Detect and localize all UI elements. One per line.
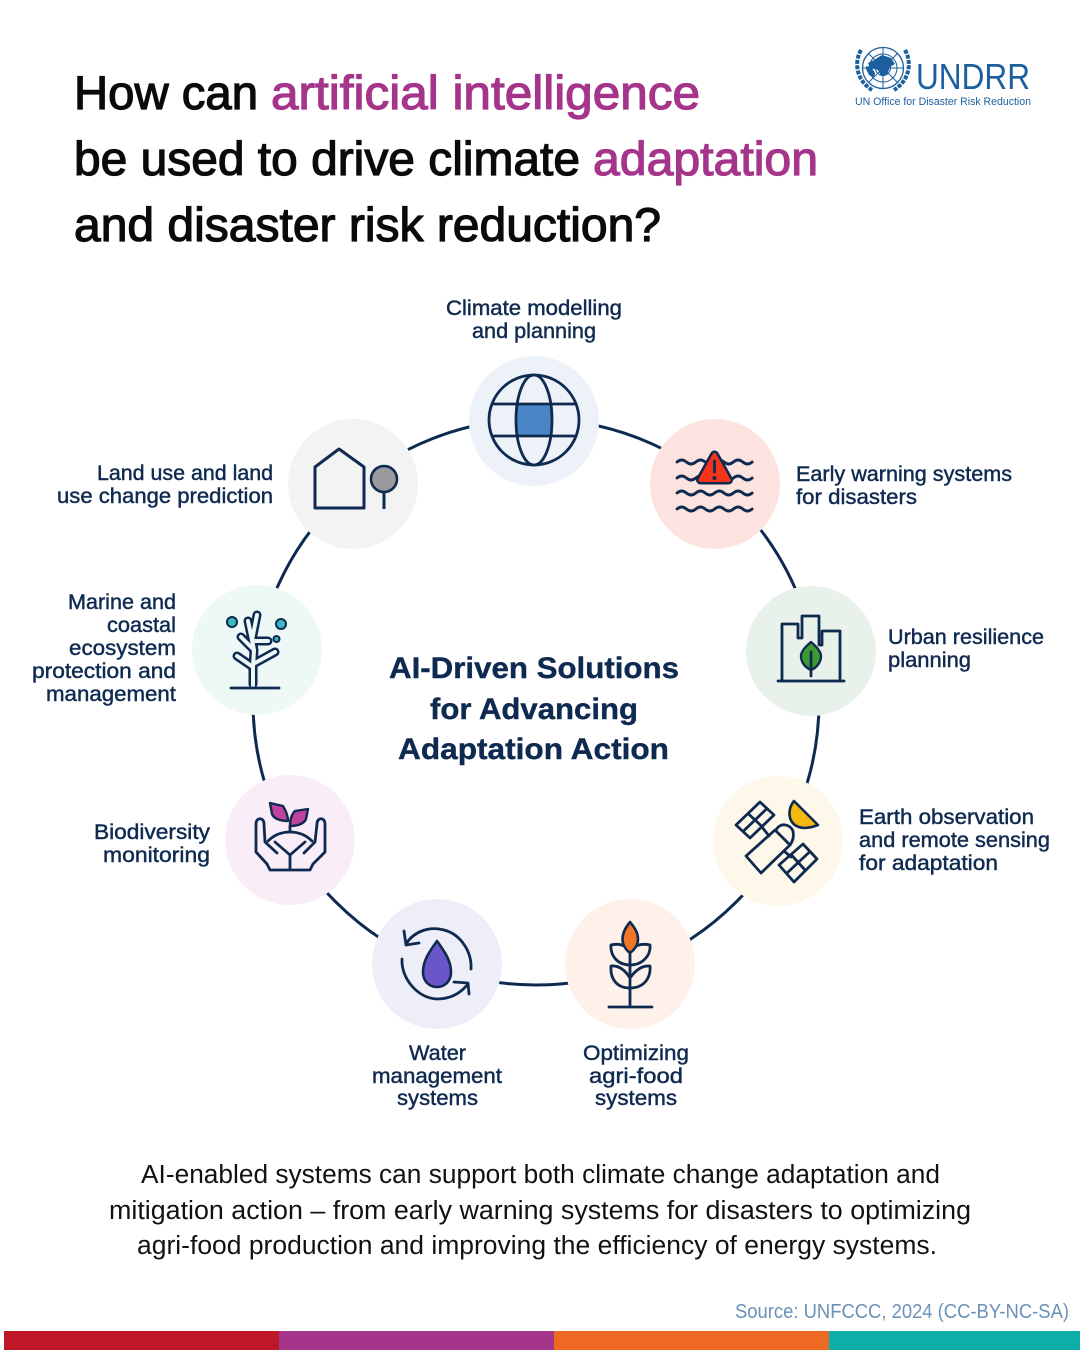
- icon: globe: [489, 375, 579, 465]
- node: biodiversity: [94, 775, 355, 905]
- node: early warning: Early warning systems: [796, 462, 1012, 486]
- node: land use: [57, 419, 418, 549]
- icon: UN emblem: [857, 48, 909, 90]
- title: How can: [74, 66, 258, 119]
- center heading: AI-Driven Solutions: [389, 652, 679, 685]
- center heading: Adaptation Action: [398, 733, 669, 766]
- icon: warning over waves: [677, 455, 752, 511]
- node: agri-food: Optimizing: [583, 1041, 689, 1065]
- node: marine and coastal: [32, 585, 322, 715]
- title: [74, 66, 818, 251]
- title: be used to drive climate: [74, 132, 580, 185]
- center heading: [389, 652, 679, 766]
- node: climate modelling: and planning: [472, 319, 596, 343]
- node: early warning: [650, 419, 1012, 549]
- node: earth observation: [713, 776, 1050, 906]
- summary paragraph: agri-food production and improving the efficiency of energy systems.: [137, 1232, 937, 1260]
- node: urban resilience: planning: [888, 648, 971, 672]
- icon: hands with seedling: [256, 803, 325, 870]
- summary paragraph: AI-enabled systems can support both climate change adaptation and: [141, 1161, 940, 1189]
- icon: water cycle: [402, 929, 471, 999]
- node: water management: systems: [397, 1086, 478, 1110]
- logo: UNDRR: UNDRR: [916, 56, 1030, 97]
- icon: house and tree: [315, 449, 397, 509]
- summary paragraph: [109, 1161, 971, 1260]
- node: earth observation: Earth observation: [859, 805, 1034, 829]
- node: marine and coastal: ecosystem: [69, 636, 176, 660]
- node: land use: Land use and land: [97, 461, 273, 485]
- icon: coral: [227, 615, 286, 690]
- node: marine and coastal: Marine and: [68, 590, 176, 614]
- logo: UNDRR: UN Office for Disaster Risk Reduction: [855, 96, 1031, 108]
- node: marine and coastal: protection and: [32, 659, 176, 683]
- node: agri-food: [565, 899, 695, 1110]
- node: biodiversity: monitoring: [103, 843, 210, 867]
- title: artificial intelligence: [271, 66, 700, 119]
- icon: city with leaf: [778, 616, 844, 681]
- node: marine and coastal: management: [46, 682, 176, 706]
- node: water management: Water: [409, 1041, 466, 1065]
- node: biodiversity: Biodiversity: [94, 820, 210, 844]
- node: agri-food: agri-food: [589, 1064, 683, 1088]
- node: climate modelling: [446, 296, 622, 486]
- title: adaptation: [593, 132, 818, 185]
- node: water management: [372, 899, 502, 1110]
- node: urban resilience: [746, 586, 1044, 716]
- logo: UNDRR: [855, 48, 1031, 108]
- icon: satellite: [736, 801, 818, 882]
- footer colour bar: [4, 1331, 1080, 1350]
- node: land use: use change prediction: [57, 484, 273, 508]
- node: climate modelling: Climate modelling: [446, 296, 622, 320]
- node: early warning: for disasters: [796, 485, 917, 509]
- node: marine and coastal: coastal: [107, 613, 176, 637]
- node: agri-food: systems: [595, 1086, 677, 1110]
- title: and disaster risk reduction?: [74, 198, 661, 251]
- summary paragraph: mitigation action – from early warning systems for disasters to optimizing: [109, 1197, 971, 1225]
- node: urban resilience: Urban resilience: [888, 625, 1044, 649]
- node: earth observation: for adaptation: [859, 851, 998, 875]
- icon: wheat: [609, 922, 652, 1007]
- center heading: for Advancing: [430, 693, 638, 726]
- node: earth observation: and remote sensing: [859, 828, 1050, 852]
- node: water management: management: [372, 1064, 502, 1088]
- diagram: ring of AI solutions: [32, 296, 1050, 1110]
